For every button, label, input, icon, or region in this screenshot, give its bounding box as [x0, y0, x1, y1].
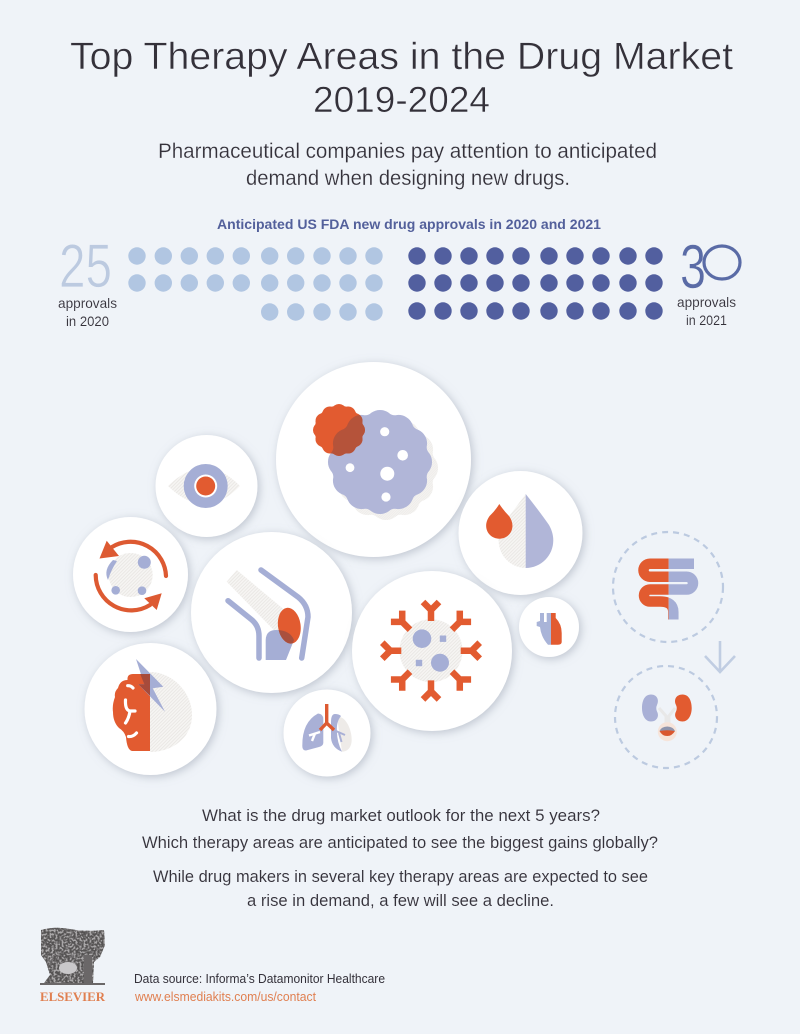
dot chart: 2021 approvals	[408, 247, 663, 320]
bubble: metabolic cycle	[73, 517, 188, 632]
text block: outlook questions: Which therapy areas are anticipated to see the biggest gains globally?	[142, 833, 658, 852]
subtitle	[158, 140, 657, 190]
icon: intestine	[644, 564, 694, 620]
icon: cycle arrows	[96, 541, 166, 610]
icon: kidneys and bladder	[642, 694, 692, 741]
stat: 25 approvals in 2020: approvals	[58, 295, 117, 311]
title: Top Therapy Areas in the Drug Market	[70, 36, 733, 78]
bubble: eye	[156, 435, 258, 537]
icon: immune cell with antibodies	[382, 602, 480, 699]
icon: blood drops	[486, 494, 553, 568]
bubble: blood	[458, 471, 582, 595]
stat: 25 approvals in 2020: 25	[59, 232, 112, 300]
data source: www.elsmediakits.com/us/contact	[134, 990, 317, 1004]
chart heading: Anticipated US FDA new drug approvals in 2020 and 2021	[217, 216, 601, 232]
data source: Data source: Informa’s Datamonitor Healthcare	[134, 972, 385, 986]
dashed circle: kidney	[615, 666, 717, 768]
stat: 30 approvals in 2021: in 2021	[686, 312, 727, 328]
icon: tumour cells	[313, 404, 438, 520]
text block: outlook statement	[153, 867, 648, 910]
arrow: decline	[705, 641, 735, 672]
bubble: heart	[519, 597, 579, 657]
stat: 25 approvals in 2020	[58, 232, 117, 329]
logo: Elsevier	[40, 928, 106, 1004]
text block: outlook questions: What is the drug market outlook for the next 5 years?	[202, 806, 600, 825]
dot chart: 2020 approvals	[128, 247, 383, 321]
bubble: oncology tumour	[276, 362, 471, 557]
logo: Elsevier: ELSEVIER	[40, 989, 106, 1004]
data source	[134, 972, 385, 1004]
title	[70, 36, 733, 120]
stat: 30 approvals in 2021: 3	[680, 233, 706, 302]
bubble: knee joint	[191, 532, 352, 693]
bubble: immunology	[352, 571, 512, 731]
text block: outlook statement: a rise in demand, a few will see a decline.	[247, 891, 554, 910]
subtitle: Pharmaceutical companies pay attention to anticipated	[158, 140, 657, 163]
text block: outlook statement: While drug makers in several key therapy areas are expected to see	[153, 867, 648, 886]
stat: 30 approvals in 2021	[677, 233, 740, 328]
stat: 25 approvals in 2020: in 2020	[66, 313, 109, 329]
bubble: brain	[84, 643, 216, 775]
icon: knee	[227, 570, 308, 660]
stat: 30 approvals in 2021: approvals	[677, 294, 736, 310]
icon: eye	[168, 464, 240, 508]
icon: heart	[537, 613, 562, 645]
text block: outlook questions	[142, 806, 658, 852]
dashed circle: gastrointestinal	[613, 532, 723, 642]
title: 2019-2024	[313, 79, 490, 120]
bubble: lungs	[284, 690, 370, 776]
icon: lungs	[302, 704, 352, 752]
icon: brain	[113, 659, 192, 752]
subtitle: demand when designing new drugs.	[246, 167, 570, 190]
